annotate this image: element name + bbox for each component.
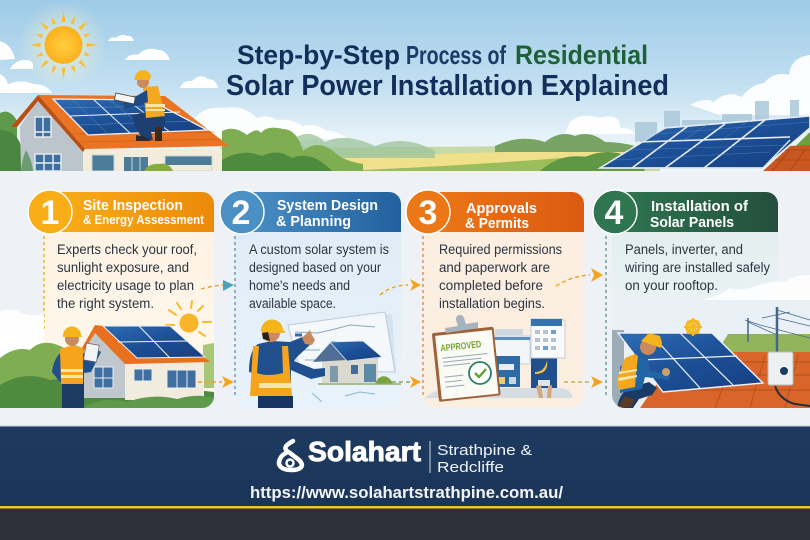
sun xyxy=(166,301,211,336)
card 1 illustration: worker inspecting house xyxy=(0,301,214,408)
card 3 description: and paperwork are xyxy=(439,260,550,275)
card 2 description xyxy=(249,242,389,311)
card 1 body xyxy=(44,232,214,408)
title: Solar Power Installation Explained xyxy=(226,70,669,102)
card 1 description: the right system. xyxy=(57,296,154,311)
clipboard: APPROVED xyxy=(440,339,482,354)
house roof xyxy=(38,95,229,149)
location name: Strathpine & xyxy=(437,442,532,459)
website URL: https://www.solahartstrathpine.com.au/ xyxy=(250,483,563,502)
card 3 description: completed before xyxy=(439,278,543,293)
card 4 description: on your rooftop. xyxy=(625,278,718,293)
card 3 dashed line xyxy=(422,236,424,396)
title: Process of xyxy=(406,40,506,70)
card 2 header: 2 xyxy=(232,194,250,232)
card 1 header: & Energy Assessment xyxy=(83,212,205,227)
card 4 header xyxy=(593,190,778,234)
card 4 illustration: installer on roof xyxy=(612,300,810,408)
card 1 dashed line xyxy=(43,236,45,330)
solar array foreground right xyxy=(600,116,810,171)
card 3 body xyxy=(423,232,584,408)
card 4 description xyxy=(624,242,770,293)
card 4 description: Panels, inverter, and xyxy=(625,242,743,257)
card 4: installation xyxy=(593,190,810,408)
title: Residential xyxy=(515,40,648,70)
icon: sun with rays xyxy=(26,6,100,80)
small house xyxy=(322,358,378,383)
card 1 description: electricity usage to plan xyxy=(57,278,194,293)
rooftop solar panels xyxy=(53,99,207,135)
fields and hills xyxy=(0,112,664,171)
worker xyxy=(62,382,84,408)
card 3 illustration: approved clipboard and documents xyxy=(425,315,573,402)
clouds xyxy=(0,34,810,147)
card 1 description xyxy=(57,242,197,311)
card 4 body xyxy=(612,232,778,340)
logo wordmark: Solahart xyxy=(308,436,421,467)
house xyxy=(83,330,125,398)
card 3 header: 3 xyxy=(419,194,437,232)
card 4 header: 4 xyxy=(605,194,624,232)
card 3 header: Approvals xyxy=(466,201,537,217)
card 3: approvals xyxy=(406,190,584,408)
card 2 description: A custom solar system is xyxy=(249,242,389,257)
worker on roof xyxy=(114,70,166,141)
power lines xyxy=(745,307,810,353)
arrow: step 3 to 4 upper xyxy=(556,268,603,286)
card 2 description: designed based on your xyxy=(249,260,381,275)
card 1 header xyxy=(28,190,214,234)
card 2 header: & Planning xyxy=(276,214,351,230)
card 2 header xyxy=(220,190,401,234)
card 2 description: home's needs and xyxy=(249,278,350,293)
card 1 description: sunlight exposure, and xyxy=(57,260,189,275)
card 1 header: Site Inspection xyxy=(83,198,183,214)
card 3 description: Required permissions xyxy=(439,242,562,257)
hero illustration banner xyxy=(0,0,810,171)
card 1 description: Experts check your roof, xyxy=(57,242,197,257)
card 3 header xyxy=(406,190,584,234)
title xyxy=(226,40,669,102)
card 2 body xyxy=(235,232,401,408)
worker xyxy=(249,336,325,383)
arrow: step 1 to 2 upper xyxy=(201,280,234,291)
card 3 description xyxy=(439,242,562,311)
location name: Redcliffe xyxy=(437,459,504,476)
arrow: step 1 to 2 lower xyxy=(198,376,234,388)
inverter xyxy=(768,352,793,385)
card 1: site inspection xyxy=(0,190,214,408)
arrow: step 3 to 4 lower xyxy=(564,376,603,388)
device xyxy=(496,356,520,387)
arrows between steps xyxy=(198,268,603,388)
clouds behind card 4 xyxy=(700,275,810,306)
card 4 dashed line xyxy=(605,236,607,396)
card 2 dashed line xyxy=(234,236,236,396)
calendar xyxy=(531,319,565,358)
location name xyxy=(437,442,532,476)
card 2 illustration: planner with blueprint xyxy=(249,312,401,408)
card 3 description: installation begins. xyxy=(439,296,545,311)
card 3 header: & Permits xyxy=(465,216,529,232)
footer band xyxy=(0,425,810,540)
icon: Solahart logo mark xyxy=(279,441,302,470)
gear icon xyxy=(684,318,702,336)
distant city skyline xyxy=(635,100,799,142)
worker xyxy=(617,382,657,408)
card 4 header: Installation of xyxy=(651,199,748,215)
card 2 description: available space. xyxy=(249,296,336,311)
house on left with rooftop panels xyxy=(11,95,229,171)
clipboard xyxy=(432,327,501,402)
title: Step-by-Step xyxy=(237,40,400,70)
card 4 description: wiring are installed safely xyxy=(624,260,770,275)
card 1 header: 1 xyxy=(41,194,59,232)
card 2: system design xyxy=(220,190,401,408)
logo divider xyxy=(430,441,431,473)
arrow: step 2 to 3 upper xyxy=(380,279,421,295)
arrow: step 2 to 3 lower xyxy=(385,376,421,388)
card 2 header: System Design xyxy=(277,198,378,214)
card 4 header: Solar Panels xyxy=(650,215,734,231)
